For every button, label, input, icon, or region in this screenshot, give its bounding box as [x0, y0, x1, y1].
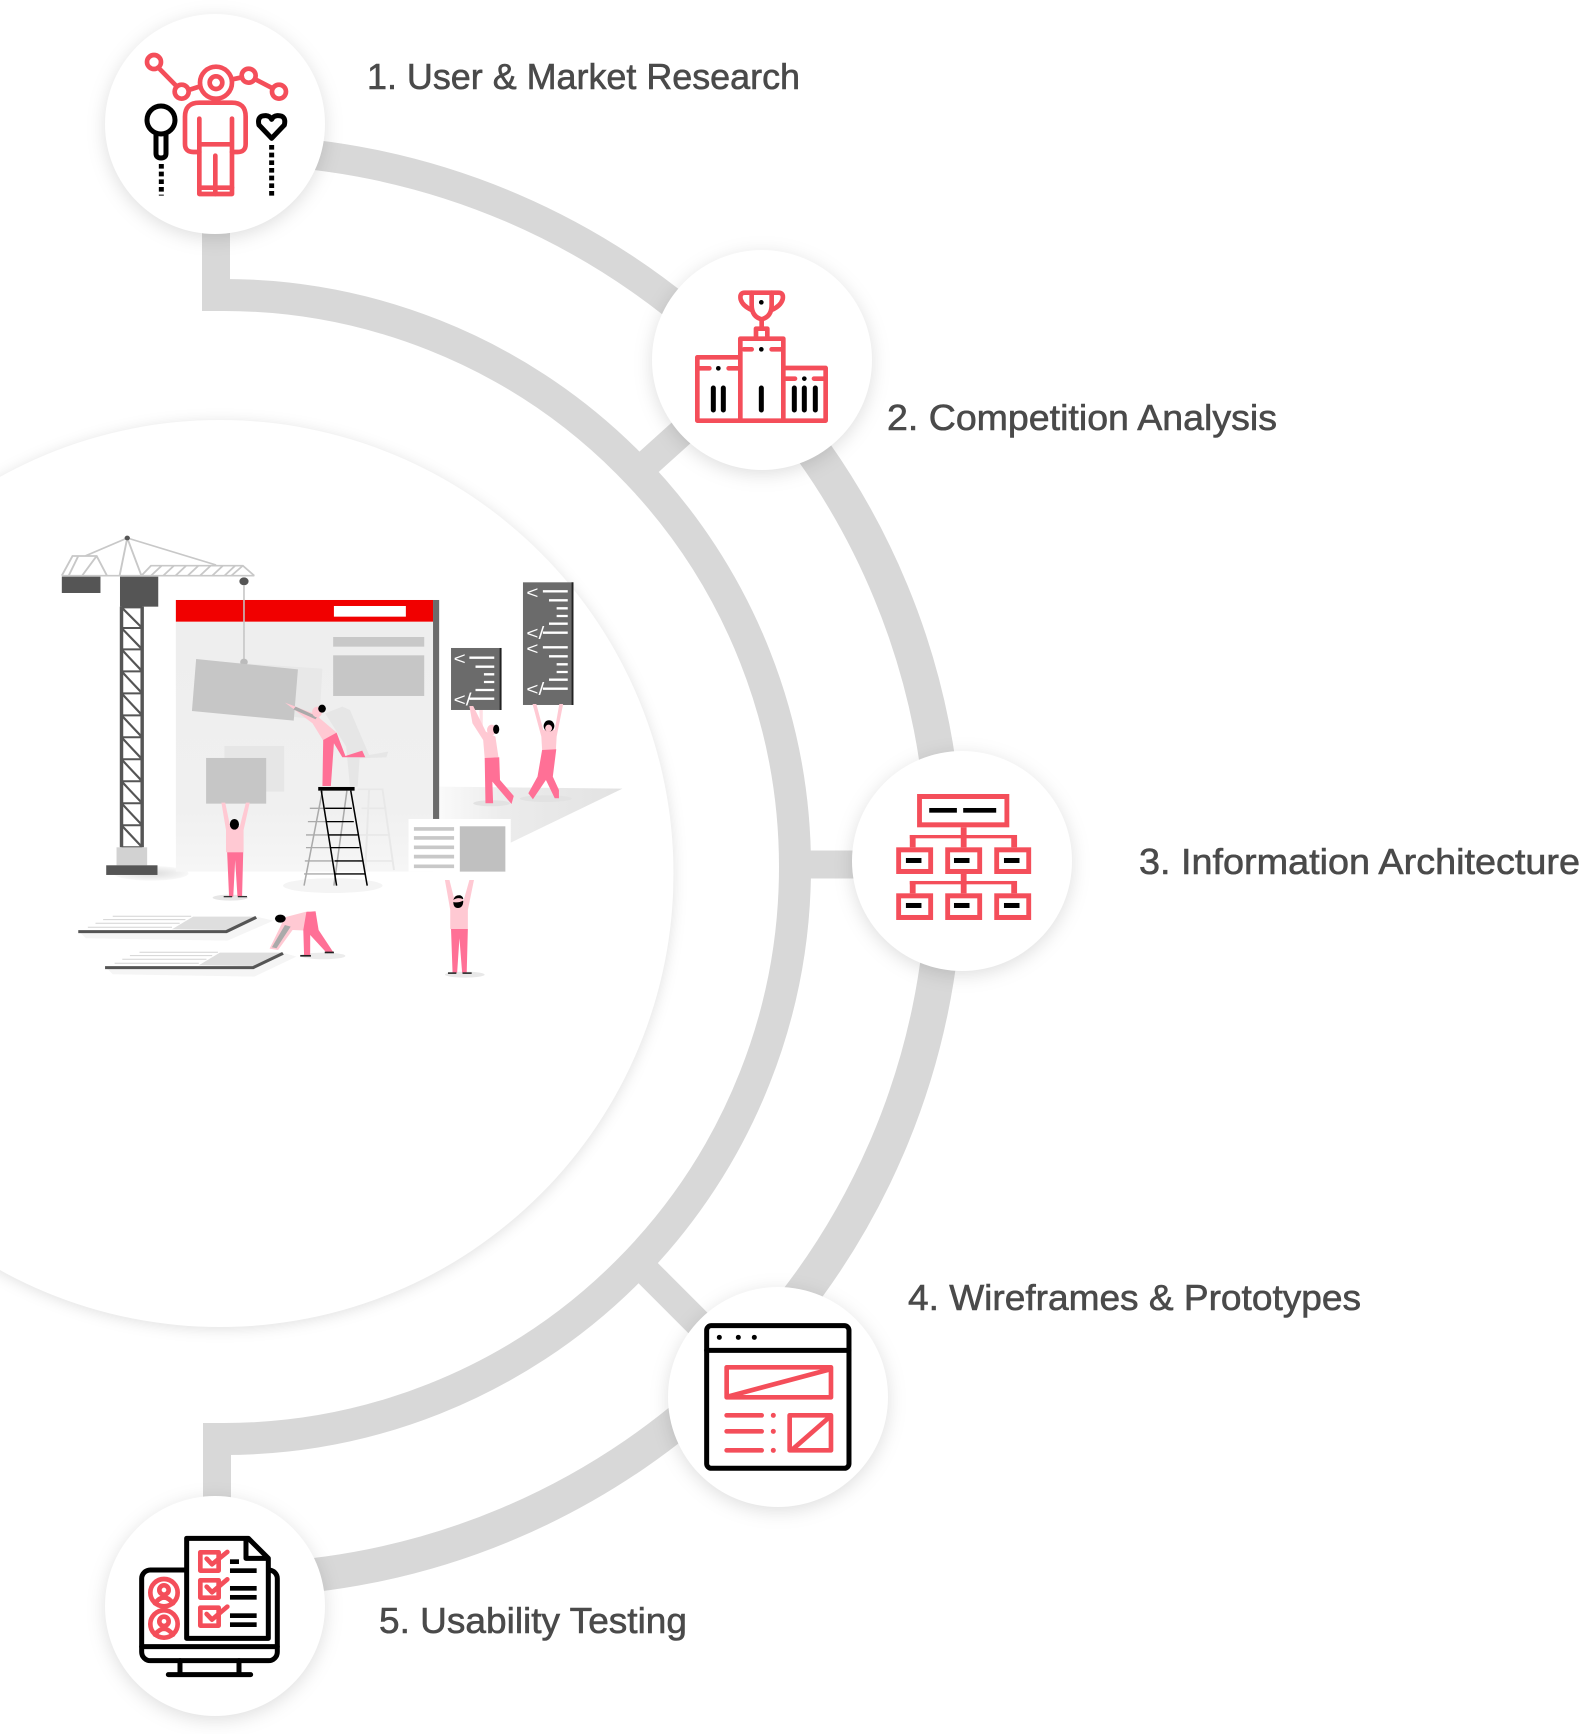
small code panel: [451, 648, 502, 710]
illustration: building a website: [62, 536, 622, 978]
base shadows: [113, 795, 572, 978]
step 3 label: 3. Information Architecture: [1139, 841, 1580, 882]
cheering worker: [445, 880, 474, 974]
icon: research person: [147, 55, 286, 196]
inner arc: [202, 295, 795, 1439]
stem to step 5: [203, 1423, 231, 1513]
plates on the ground: [78, 916, 296, 977]
step 1: node: [105, 14, 325, 234]
tall code panel: </: [526, 623, 545, 644]
spoke to step 3: [790, 850, 962, 878]
icon: usability testing monitor: [142, 1538, 277, 1675]
worker on ladder: [285, 703, 365, 786]
ladder: [304, 787, 367, 886]
step 2: node: [652, 250, 872, 470]
small code panel: <: [454, 649, 466, 669]
worker with small panel: [469, 706, 514, 804]
step 2 label: 2. Competition Analysis: [887, 397, 1277, 438]
step 3: node: [852, 751, 1072, 971]
floor shadow: [439, 787, 622, 843]
outer arc: step 4 to 5: [230, 1363, 743, 1580]
step 5 label: 5. Usability Testing: [379, 1600, 687, 1641]
small code panel: </: [454, 690, 472, 710]
box carried by worker: [206, 758, 266, 804]
step 1 label: 1. User & Market Research: [367, 56, 800, 97]
web page under construction: [176, 600, 439, 872]
stem to step 1: [202, 225, 230, 311]
central white disc: [0, 420, 674, 1327]
spoke to step 2: [640, 360, 762, 470]
tall code panel: <: [526, 583, 538, 603]
icon: podium and trophy: [697, 293, 826, 421]
hanging panel: [192, 659, 298, 721]
tall code panel: <: [526, 639, 538, 659]
worker with tall panel: [528, 704, 563, 799]
outer arc: step 1 to 2: [230, 150, 749, 373]
tall code panel: [523, 582, 573, 705]
outer arc: step 2 to 4: [743, 373, 945, 1363]
icon: wireframe window: [707, 1326, 849, 1468]
worker carrying box: [221, 803, 250, 897]
step 5: node: [105, 1496, 325, 1716]
step 4 label: 4. Wireframes & Prototypes: [908, 1277, 1361, 1318]
spoke to step 4: [636, 1261, 778, 1403]
tall code panel: </: [526, 679, 545, 700]
floating card: [409, 819, 511, 872]
bending worker: [270, 911, 334, 957]
icon: sitemap hierarchy: [896, 794, 1031, 920]
crane: [62, 536, 254, 875]
connector arcs: [202, 150, 962, 1580]
step 4: node: [668, 1287, 888, 1507]
